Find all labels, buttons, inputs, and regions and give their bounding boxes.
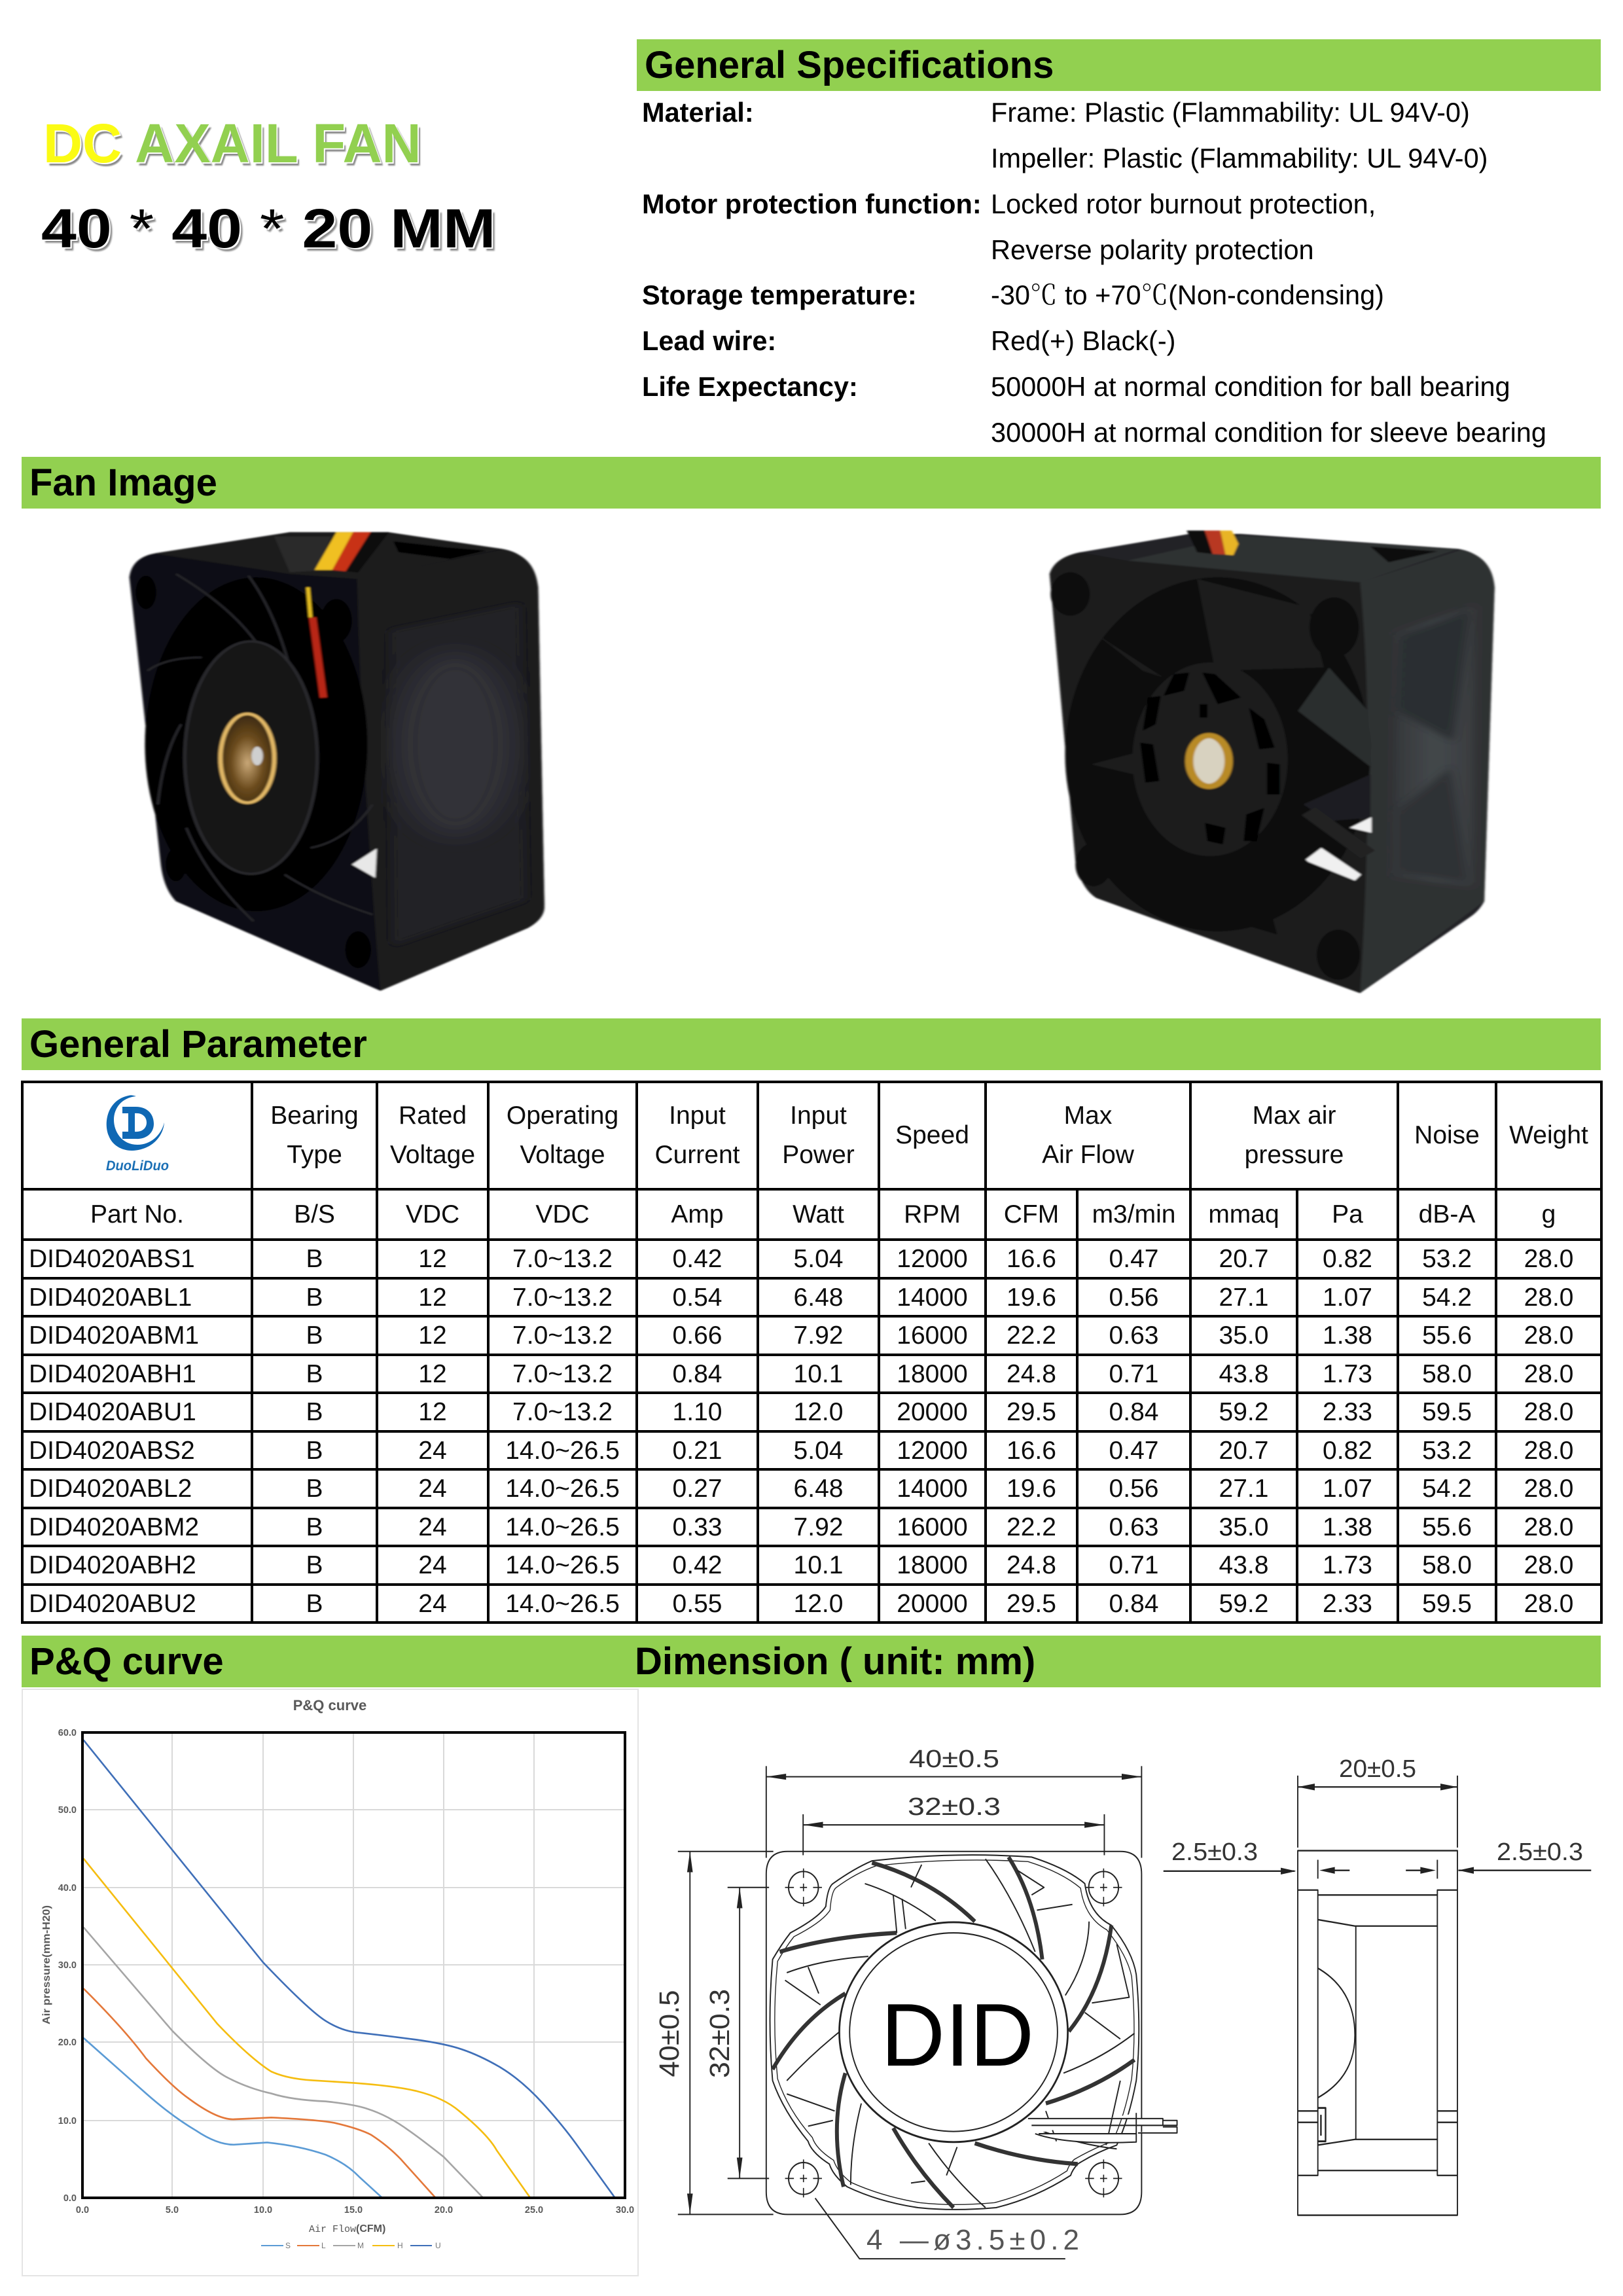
- table: general parameters: DID4020ABU2: [29, 1590, 196, 1618]
- spec: motor protection: Locked rotor burnout protection,: [991, 188, 1376, 219]
- heading: General Specifications: General Specifications: [645, 44, 1054, 86]
- table: general parameters: B: [306, 1551, 323, 1579]
- table: general parameters: 28.0: [1524, 1513, 1573, 1541]
- panel: P&Q chart: [22, 1689, 639, 2276]
- table: general parameters: 28.0: [1524, 1551, 1573, 1579]
- spec: storage temperature: -30℃ to +70℃(Non-condensing): [991, 273, 1384, 312]
- dimension: left 2.5: 2.5±0.3: [1171, 1839, 1258, 1866]
- table: general parameters: B: [306, 1321, 323, 1350]
- table: general parameters: 12: [418, 1398, 447, 1426]
- table: general parameters: 54.2: [1422, 1475, 1472, 1503]
- table: general parameters: 2.33: [1323, 1398, 1372, 1426]
- table: general parameters: 5.04: [794, 1437, 843, 1465]
- spec: motor protection: [642, 188, 1376, 219]
- table: general parameters: Noise: [1414, 1121, 1480, 1149]
- table: general parameters: Power: [782, 1141, 855, 1169]
- side dimension lines: [1164, 1776, 1591, 1878]
- table: general parameters: 20.7: [1219, 1437, 1268, 1465]
- y axis tick labels: 50.0: [58, 1805, 77, 1816]
- table: general parameters: Input: [669, 1102, 726, 1130]
- dimension: hole spacing height 32: 32±0.3: [704, 1989, 736, 2078]
- table: general parameters: 14000: [897, 1283, 968, 1312]
- curve: L: [84, 1988, 435, 2198]
- y axis tick labels: 0.0: [63, 2193, 77, 2204]
- legend: [261, 2241, 441, 2250]
- x axis tick labels: 0.0: [76, 2205, 89, 2215]
- table: general parameters: 0.56: [1109, 1283, 1158, 1312]
- table: general parameters: B: [306, 1437, 323, 1465]
- table: general parameters: [21, 1081, 1603, 1624]
- table: general parameters: Bearing: [270, 1102, 359, 1130]
- table: general parameters: 0.55: [673, 1590, 722, 1618]
- table: general parameters: 24.8: [1007, 1551, 1056, 1579]
- table: general parameters: 6.48: [794, 1475, 843, 1503]
- spec: material impeller: Impeller: Plastic (Flammability: UL 94V-0): [991, 143, 1488, 173]
- curve: U: [84, 1740, 615, 2198]
- table: general parameters: 28.0: [1524, 1475, 1573, 1503]
- table: general parameters: 35.0: [1219, 1321, 1268, 1350]
- dimension: height 40: 40±0.5: [654, 1990, 685, 2077]
- table: general parameters: Max: [1064, 1102, 1112, 1130]
- table: general parameters: 0.63: [1109, 1321, 1158, 1350]
- motor hub: [839, 1922, 1068, 2142]
- spec: lead wire: Lead wire:: [642, 325, 776, 356]
- table: general parameters: 59.5: [1422, 1590, 1472, 1618]
- table: general parameters: 10.1: [794, 1551, 843, 1579]
- table: general parameters: 43.8: [1219, 1360, 1268, 1388]
- heading: P&Q curve and Dimension bar: P&Q curve: [29, 1640, 224, 1683]
- table: general parameters: DID4020ABS1: [29, 1245, 195, 1273]
- curve: H: [84, 1859, 530, 2198]
- x axis tick labels: 30.0: [616, 2205, 634, 2215]
- table: general parameters: 28.0: [1524, 1283, 1573, 1312]
- spec: life expectancy ball: Life Expectancy:: [642, 371, 858, 402]
- dimension: hole diameter: 4 —ø3.5±0.2: [866, 2224, 1079, 2256]
- table: general parameters: DID4020ABU1: [29, 1398, 196, 1426]
- spec: storage temperature: Storage temperature:: [642, 279, 917, 310]
- table: general parameters: 27.1: [1219, 1475, 1268, 1503]
- chart gridlines: [82, 1732, 625, 2198]
- table: general parameters: 12.0: [794, 1398, 843, 1426]
- table: general parameters: 5.04: [794, 1245, 843, 1273]
- x axis tick labels: 15.0: [344, 2205, 363, 2215]
- dimension: hole spacing 32: 32±0.3: [908, 1793, 1001, 1821]
- table: general parameters: 20000: [897, 1398, 968, 1426]
- table: general parameters: 14.0~26.5: [505, 1551, 620, 1579]
- spec: life expectancy ball: 50000H at normal condition for ball bearing: [991, 371, 1510, 402]
- spec: life expectancy ball: [642, 371, 1510, 402]
- table: general parameters: Speed: [895, 1121, 969, 1149]
- table: general parameters: 18000: [897, 1360, 968, 1388]
- table: general parameters: 0.47: [1109, 1245, 1158, 1273]
- spec: storage temperature: [642, 273, 1384, 312]
- table: general parameters: 0.33: [673, 1513, 722, 1541]
- table: general parameters: mmaq: [1208, 1200, 1279, 1228]
- table: general parameters: 43.8: [1219, 1551, 1268, 1579]
- fan blades: hatched edges: [773, 1857, 1135, 2208]
- table: general parameters: dB-A: [1419, 1200, 1475, 1228]
- table: general parameters: VDC: [406, 1200, 459, 1228]
- table: general parameters: 7.92: [794, 1321, 843, 1350]
- x axis tick labels: 20.0: [435, 2205, 453, 2215]
- table: general parameters: DID4020ABH2: [29, 1551, 196, 1579]
- lead wire: [1028, 2113, 1177, 2143]
- table: general parameters: 7.0~13.2: [512, 1398, 613, 1426]
- table: general parameters: 14.0~26.5: [505, 1590, 620, 1618]
- table: general parameters: B: [306, 1513, 323, 1541]
- table: general parameters: B: [306, 1245, 323, 1273]
- curve: S: [84, 2038, 382, 2198]
- spec: reverse polarity: Reverse polarity protection: [991, 234, 1314, 265]
- curve: M: [84, 1928, 483, 2198]
- legend: U: [435, 2241, 441, 2250]
- front frame: [766, 1852, 1141, 2214]
- table: general parameters: 22.2: [1007, 1513, 1056, 1541]
- table: general parameters: 16000: [897, 1513, 968, 1541]
- fan ring: [770, 1855, 1139, 2210]
- table: general parameters: 58.0: [1422, 1551, 1472, 1579]
- table: general parameters: 12000: [897, 1437, 968, 1465]
- table: general parameters: 59.2: [1219, 1590, 1268, 1618]
- table: general parameters: 59.2: [1219, 1398, 1268, 1426]
- table: general parameters: 14.0~26.5: [505, 1437, 620, 1465]
- table: general parameters: 22.2: [1007, 1321, 1056, 1350]
- table: general parameters: 24.8: [1007, 1360, 1056, 1388]
- table: general parameters: 16.6: [1007, 1245, 1056, 1273]
- table: general parameters: Voltage: [390, 1141, 475, 1169]
- table: general parameters: m3/min: [1092, 1200, 1175, 1228]
- spec: motor protection: Motor protection function:: [642, 188, 982, 219]
- table: general parameters: 0.84: [1109, 1398, 1158, 1426]
- dimension: depth 20: 20±0.5: [1339, 1755, 1416, 1783]
- table: general parameters: 12000: [897, 1245, 968, 1273]
- table: general parameters: Input: [790, 1102, 847, 1130]
- x axis tick labels: 10.0: [254, 2205, 272, 2215]
- table: general parameters: 19.6: [1007, 1283, 1056, 1312]
- table: general parameters: 1.10: [673, 1398, 722, 1426]
- heading: P&Q curve and Dimension bar: [22, 1636, 1601, 1687]
- table: general parameters: 18000: [897, 1551, 968, 1579]
- side view drawing: [1164, 1776, 1591, 2215]
- table: general parameters: 0.84: [1109, 1590, 1158, 1618]
- table: general parameters: Part No.: [90, 1200, 184, 1228]
- table: general parameters: 7.0~13.2: [512, 1283, 613, 1312]
- table: general parameters: Air Flow: [1042, 1141, 1134, 1169]
- table: general parameters: 1.38: [1323, 1321, 1372, 1350]
- table: general parameters: 59.5: [1422, 1398, 1472, 1426]
- table: general parameters: 24: [418, 1513, 447, 1541]
- table: general parameters: 0.27: [673, 1475, 722, 1503]
- table: general parameters: 20.7: [1219, 1245, 1268, 1273]
- mounting holes: [785, 1869, 1122, 2197]
- table: general parameters: 7.0~13.2: [512, 1245, 613, 1273]
- table: general parameters: 12: [418, 1321, 447, 1350]
- table: general parameters: 24: [418, 1590, 447, 1618]
- table: general parameters: 0.42: [673, 1245, 722, 1273]
- table: general parameters: 0.82: [1323, 1437, 1372, 1465]
- table: general parameters: 24: [418, 1475, 447, 1503]
- table: general parameters: 55.6: [1422, 1513, 1472, 1541]
- legend: L: [321, 2241, 326, 2250]
- table: general parameters: 0.84: [673, 1360, 722, 1388]
- table: general parameters: 29.5: [1007, 1590, 1056, 1618]
- table: general parameters: 55.6: [1422, 1321, 1472, 1350]
- heading: Fan Image: Fan Image: [29, 461, 217, 504]
- x axis title: Air Flow(CFM): [309, 2223, 385, 2235]
- table: general parameters: 0.66: [673, 1321, 722, 1350]
- x axis tick labels: [76, 2205, 634, 2215]
- table: general parameters: 2.33: [1323, 1590, 1372, 1618]
- table: general parameters: 14000: [897, 1475, 968, 1503]
- table: general parameters: 24: [418, 1437, 447, 1465]
- fan blades: thin edges: [785, 1859, 1135, 2208]
- table: general parameters: DID4020ABH1: [29, 1360, 196, 1388]
- table: general parameters: 27.1: [1219, 1283, 1268, 1312]
- table: general parameters: 0.82: [1323, 1245, 1372, 1273]
- table: general parameters: DID4020ABM2: [29, 1513, 199, 1541]
- table: general parameters: 28.0: [1524, 1590, 1573, 1618]
- table: general parameters: Pa: [1332, 1200, 1363, 1228]
- heading: General Parameter: [22, 1018, 1601, 1070]
- y axis tick labels: 10.0: [58, 2116, 77, 2126]
- image: fan front view: [128, 531, 546, 992]
- legend: S: [285, 2241, 291, 2250]
- table: general parameters: 35.0: [1219, 1513, 1268, 1541]
- table: general parameters: 28.0: [1524, 1360, 1573, 1388]
- heading: General Specifications: [637, 39, 1601, 91]
- title: fan size: 40 * 40 * 20 MM: [41, 198, 496, 259]
- table: general parameters: 0.47: [1109, 1437, 1158, 1465]
- spec: material frame: [642, 97, 1470, 128]
- y axis tick labels: 60.0: [58, 1728, 77, 1738]
- table: general parameters: 20000: [897, 1590, 968, 1618]
- dimension lines: [678, 1766, 1141, 2259]
- table: general parameters: g: [1542, 1200, 1556, 1228]
- table: general parameters: DID4020ABL1: [29, 1283, 192, 1312]
- table: general parameters: B: [306, 1590, 323, 1618]
- table: general parameters: CFM: [1004, 1200, 1059, 1228]
- table: general parameters: 1.07: [1323, 1283, 1372, 1312]
- table: general parameters: VDC: [535, 1200, 590, 1228]
- dimension: right 2.5: 2.5±0.3: [1497, 1839, 1583, 1866]
- table: general parameters: 28.0: [1524, 1398, 1573, 1426]
- spec: life expectancy sleeve: 30000H at normal condition for sleeve bearing: [991, 417, 1546, 448]
- label: DID: DID: [881, 1985, 1034, 2085]
- table: general parameters: 12.0: [794, 1590, 843, 1618]
- table: general parameters: Operating: [507, 1102, 618, 1130]
- table: general parameters: 16.6: [1007, 1437, 1056, 1465]
- table: general parameters: Voltage: [520, 1141, 605, 1169]
- table: general parameters: 16000: [897, 1321, 968, 1350]
- table: general parameters: 12: [418, 1360, 447, 1388]
- table: general parameters: RPM: [904, 1200, 961, 1228]
- spec: lead wire: Red(+) Black(-): [991, 325, 1175, 356]
- heading: P&Q curve and Dimension bar: Dimension ( unit: mm): [635, 1640, 1035, 1683]
- table: general parameters: DID4020ABL2: [29, 1475, 192, 1503]
- image: fan back view: [1048, 529, 1497, 994]
- logo: DuoLiDuo: [106, 1095, 169, 1174]
- arrowheads: [687, 1774, 1141, 2214]
- table: general parameters: 12: [418, 1245, 447, 1273]
- table: general parameters: 53.2: [1422, 1437, 1472, 1465]
- table: general parameters: 1.73: [1323, 1551, 1372, 1579]
- table: general parameters: 0.21: [673, 1437, 722, 1465]
- table: general parameters: 29.5: [1007, 1398, 1056, 1426]
- table: general parameters: 0.42: [673, 1551, 722, 1579]
- table: general parameters: 1.07: [1323, 1475, 1372, 1503]
- table: general parameters: 0.71: [1109, 1551, 1158, 1579]
- spec: material frame: Frame: Plastic (Flammability: UL 94V-0): [991, 97, 1470, 128]
- table: general parameters: Weight: [1509, 1121, 1588, 1149]
- table: general parameters: DID4020ABS2: [29, 1437, 195, 1465]
- chart title: P&Q curve: [293, 1697, 366, 1713]
- table: general parameters: Amp: [671, 1200, 724, 1228]
- table: general parameters: 54.2: [1422, 1283, 1472, 1312]
- table: general parameters: 1.73: [1323, 1360, 1372, 1388]
- table: general parameters: B: [306, 1360, 323, 1388]
- legend: H: [397, 2241, 403, 2250]
- spec: lead wire: [642, 325, 1175, 356]
- table: general parameters: 28.0: [1524, 1321, 1573, 1350]
- title: DC AXAIL FAN: DC AXAIL FAN: [43, 113, 421, 174]
- table: general parameters: 7.0~13.2: [512, 1360, 613, 1388]
- table: general parameters: 0.56: [1109, 1475, 1158, 1503]
- heading: General Parameter: General Parameter: [29, 1023, 367, 1066]
- x axis tick labels: 5.0: [166, 2205, 179, 2215]
- table: general parameters: B/S: [294, 1200, 335, 1228]
- chart plot frame: [82, 1732, 625, 2198]
- y axis tick labels: 20.0: [58, 2037, 77, 2048]
- table: general parameters: 53.2: [1422, 1245, 1472, 1273]
- table: general parameters: 12: [418, 1283, 447, 1312]
- table: general parameters: Max air: [1253, 1102, 1336, 1130]
- table: general parameters: Current: [654, 1141, 740, 1169]
- front view drawing: [678, 1766, 1177, 2259]
- y axis title: Air pressure(mm-H20): [41, 1905, 52, 2024]
- spec: material frame: Material:: [642, 97, 754, 128]
- x axis tick labels: 25.0: [525, 2205, 543, 2215]
- y axis tick labels: [58, 1728, 77, 2204]
- table: general parameters: 0.63: [1109, 1513, 1158, 1541]
- table: general parameters: B: [306, 1475, 323, 1503]
- table: general parameters: 19.6: [1007, 1475, 1056, 1503]
- y axis tick labels: 30.0: [58, 1960, 77, 1971]
- table: general parameters: DID4020ABM1: [29, 1321, 199, 1350]
- table: general parameters: B: [306, 1283, 323, 1312]
- table: general parameters: 24: [418, 1551, 447, 1579]
- table: general parameters: B: [306, 1398, 323, 1426]
- table: general parameters: 7.0~13.2: [512, 1321, 613, 1350]
- table: general parameters: 0.71: [1109, 1360, 1158, 1388]
- table: general parameters: 58.0: [1422, 1360, 1472, 1388]
- table: general parameters: 7.92: [794, 1513, 843, 1541]
- logo: DuoLiDuo: DuoLiDuo: [106, 1158, 169, 1174]
- table: general parameters: 0.54: [673, 1283, 722, 1312]
- legend: M: [357, 2241, 364, 2250]
- table: general parameters: Type: [287, 1141, 342, 1169]
- table: general parameters: 6.48: [794, 1283, 843, 1312]
- table: general parameters: 28.0: [1524, 1245, 1573, 1273]
- table: general parameters: Watt: [793, 1200, 844, 1228]
- table: general parameters: 28.0: [1524, 1437, 1573, 1465]
- diagram: dimension drawings: [654, 1746, 1592, 2259]
- table: general parameters: pressure: [1245, 1141, 1344, 1169]
- table: general parameters: 14.0~26.5: [505, 1513, 620, 1541]
- chart curves: [84, 1740, 615, 2198]
- y axis tick labels: 40.0: [58, 1883, 77, 1893]
- dimension: width 40: 40±0.5: [909, 1746, 999, 1773]
- table: general parameters: 1.38: [1323, 1513, 1372, 1541]
- panel: specification list: [642, 97, 1546, 448]
- table: general parameters: Rated: [399, 1102, 467, 1130]
- heading: Fan Image: [22, 457, 1601, 509]
- table: general parameters: 14.0~26.5: [505, 1475, 620, 1503]
- table: general parameters: 10.1: [794, 1360, 843, 1388]
